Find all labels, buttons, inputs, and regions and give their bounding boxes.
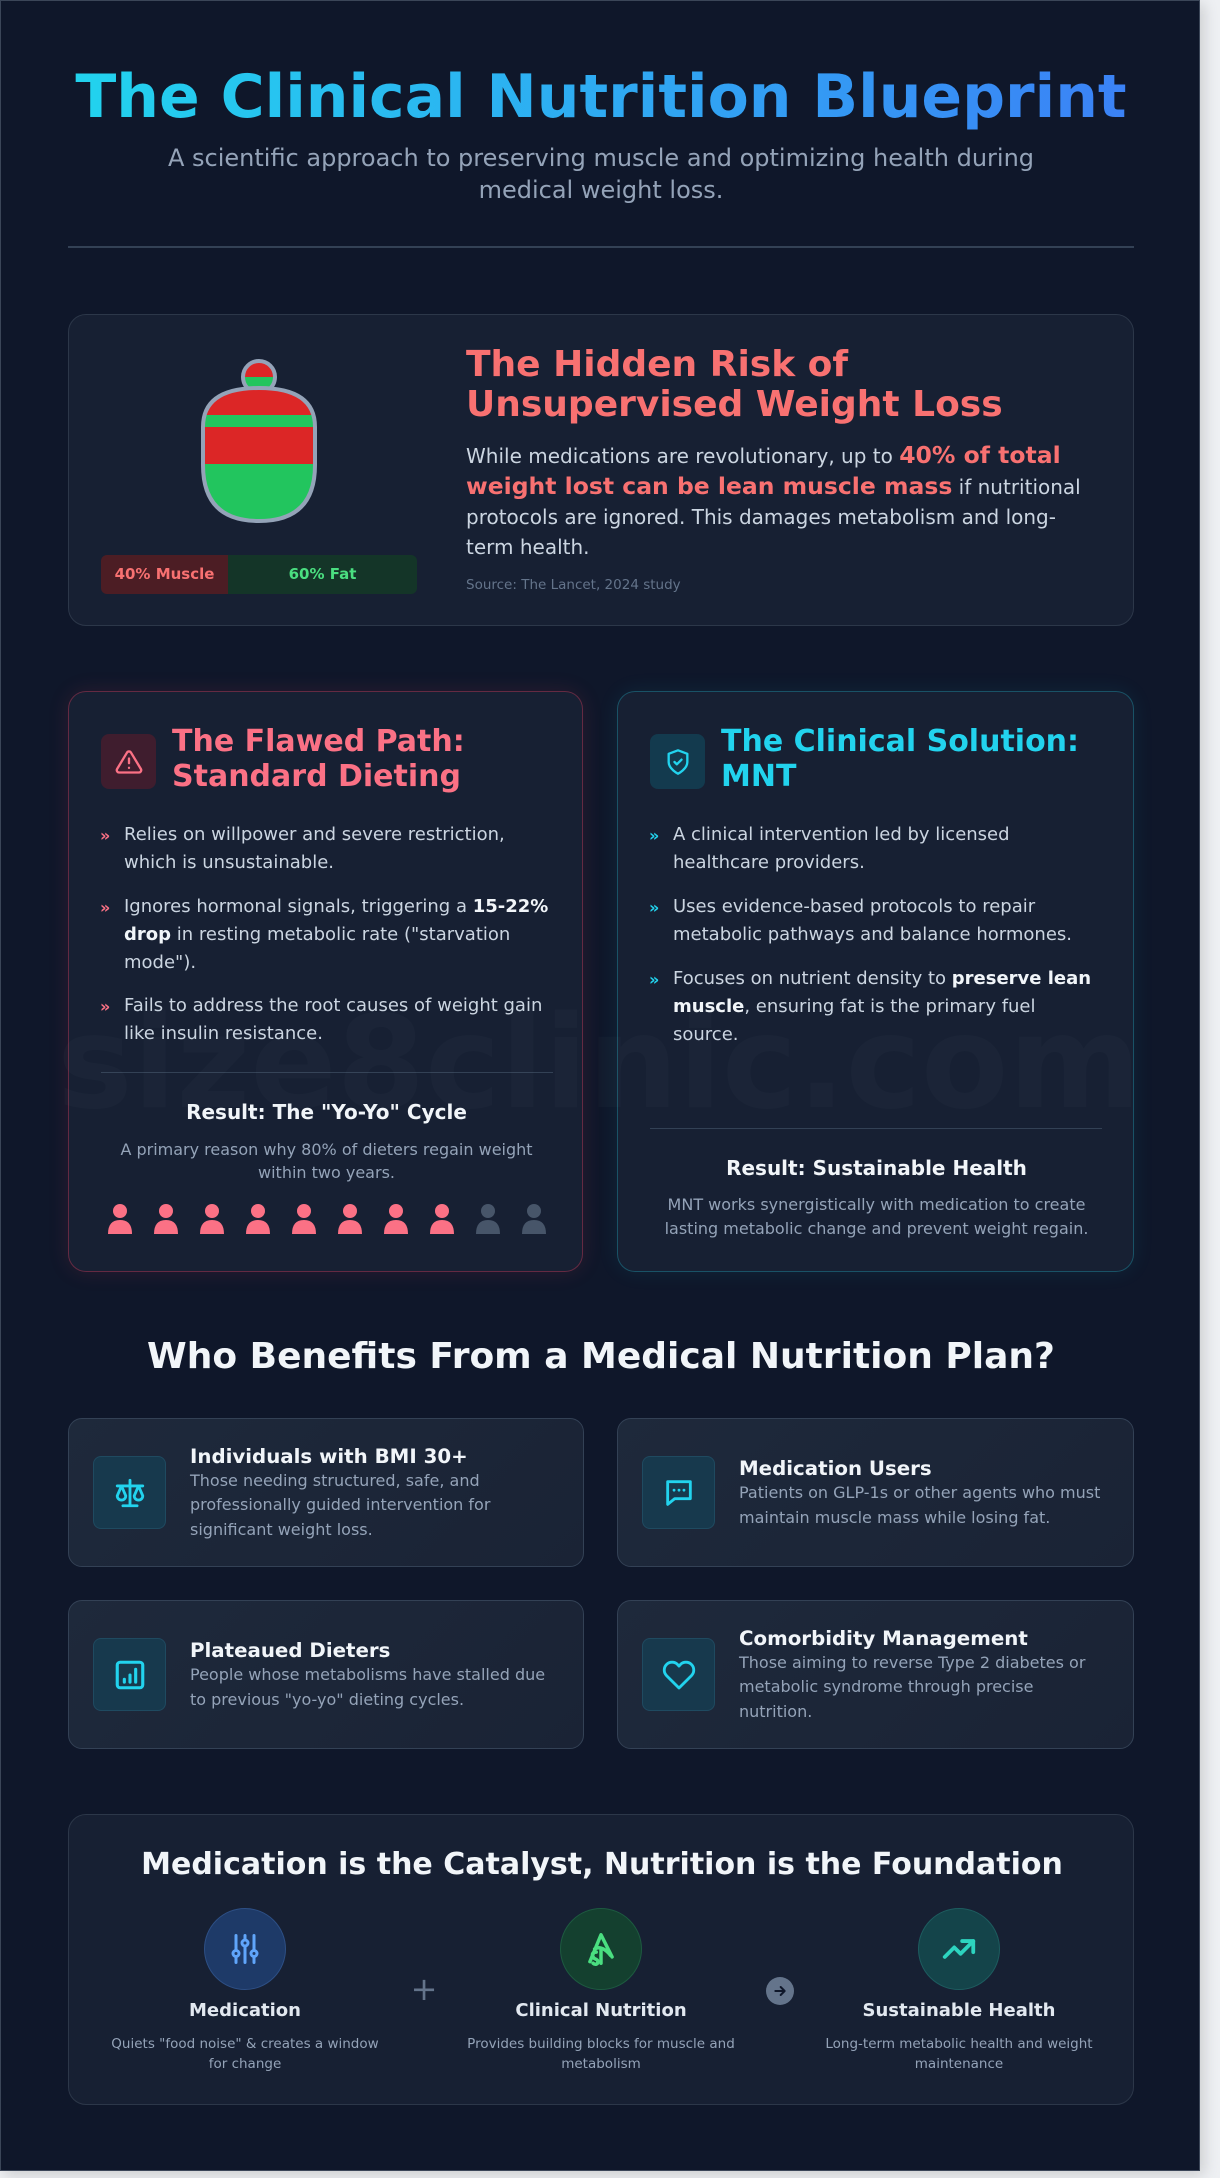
bar: 40% muscle / 60% fat: 60% Fat [289,565,356,583]
panel: catalyst & foundation [68,1814,1134,2105]
panel: catalyst & foundation: Long-term metabolic health and weight maintenance [825,2036,1093,2072]
card: comorbidity [617,1600,1134,1749]
panel: hidden risk [68,314,1134,626]
panel: clinical solution: » [649,970,659,989]
heading [172,724,465,794]
icon: chat [642,1456,715,1529]
card: BMI 30+: Individuals with BMI 30+ [190,1445,468,1468]
heading: who benefits: Who Benefits From a Medical Nutrition Plan? [147,1336,1055,1377]
icon: sustainable health [918,1908,1000,1990]
result: Result: Sustainable Health [726,1156,1027,1180]
card: BMI 30+: Those needing structured, safe, and professionally guided intervention for significant weight loss. [190,1471,490,1539]
label: clinical nutrition: Clinical Nutrition [515,2000,687,2021]
panel: flawed path: » [100,997,110,1016]
card: plateaued dieters: People whose metabolisms have stalled due to previous "yo-yo" dieting cycles. [190,1665,545,1708]
panel: flawed path: A primary reason why 80% of dieters regain weight within two years. [120,1140,533,1182]
heading: MNT [721,759,796,794]
panel: clinical solution: Uses evidence-based protocols to repair metabolic pathways and balance hormones. [673,896,1072,945]
icon: body composition bottle [201,359,317,523]
bullets: Relies on willpower and severe restriction, which is unsustainable. [124,824,505,873]
panel: flawed path: Ignores hormonal signals, triggering a 15-22% drop in resting metabolic rate ("starvation mode"). [124,896,548,973]
card: comorbidity: Comorbidity Management [739,1627,1028,1650]
icon: clinical nutrition [560,1908,642,1990]
panel: catalyst & foundation: Provides building blocks for muscle and metabolism [467,2036,735,2072]
card: plateaued dieters: Plateaued Dieters [190,1639,390,1662]
panel: catalyst & foundation: Quiets "food noise" & creates a window for change [111,2036,379,2072]
subtitle: A scientific approach to preserving muscle and optimizing health during medical weight loss. [168,144,1034,204]
result: Result: The "Yo-Yo" Cycle [186,1100,467,1124]
heading [466,344,1003,425]
icon: scale [93,1456,166,1529]
heading: Standard Dieting [172,759,461,794]
heading: The Clinical Solution: [721,724,1079,759]
bullets: A clinical intervention led by licensed healthcare providers. [673,824,1010,873]
panel: clinical solution: » [649,826,659,845]
heading: The Hidden Risk of [466,344,848,385]
panel: clinical solution: MNT works synergistically with medication to create lasting metabolic change and prevent weight regain. [665,1195,1088,1238]
icon: heart [642,1638,715,1711]
card: medication users: Medication Users [739,1457,932,1480]
title: The Clinical Nutrition Blueprint [75,62,1127,132]
icon: chart [93,1638,166,1711]
bar: 40% muscle / 60% fat: 40% Muscle [115,565,214,583]
card: BMI 30+ [68,1418,584,1567]
people icons [108,1204,546,1234]
bar: 40% muscle / 60% fat [101,555,417,594]
panel: clinical solution: Focuses on nutrient density to preserve lean muscle, ensuring fat is the primary fuel source. [673,968,1091,1045]
card: plateaued dieters [68,1600,584,1749]
card: medication users [617,1418,1134,1567]
source: Source: The Lancet, 2024 study [466,577,681,593]
icon: warning [101,734,156,789]
panel: clinical solution [617,691,1134,1272]
card: medication users: Patients on GLP-1s or other agents who must maintain muscle mass while losing fat. [739,1483,1100,1526]
panel: clinical solution: » [649,898,659,917]
panel: flawed path: Fails to address the root causes of weight gain like insulin resistance. [124,995,542,1044]
heading: The Flawed Path: [172,724,465,759]
icon: plus: + [411,1970,437,2008]
label: medication: Medication [189,2000,301,2021]
heading: Medication is the Catalyst, Nutrition is the Foundation [141,1847,1063,1882]
card: comorbidity: Those aiming to reverse Type 2 diabetes or metabolic syndrome through precise nutrition. [739,1653,1085,1721]
label: sustainable health: Sustainable Health [863,2000,1055,2021]
panel: flawed path [68,691,583,1272]
heading [721,724,1079,794]
icon: medication [204,1908,286,1990]
text block: While medications are revolutionary, up to 40% of total weight lost can be lean muscle mass if nutritional protocols are ignored. This damages metabolism and long-term health. [466,441,1081,559]
panel: flawed path: » [100,826,110,845]
heading: Unsupervised Weight Loss [466,384,1003,425]
icon: arrow [766,1977,794,2005]
icon: shield [650,734,705,789]
panel: flawed path: » [100,898,110,917]
